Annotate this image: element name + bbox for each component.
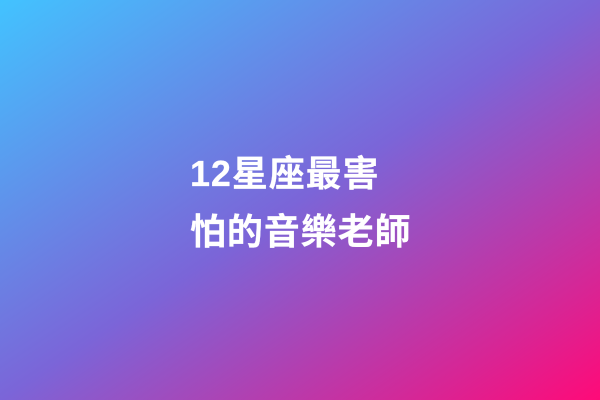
title: [190, 153, 411, 252]
title line 1: 12星座最害: [190, 153, 379, 194]
title line 2: 怕的音樂老師: [190, 211, 411, 252]
